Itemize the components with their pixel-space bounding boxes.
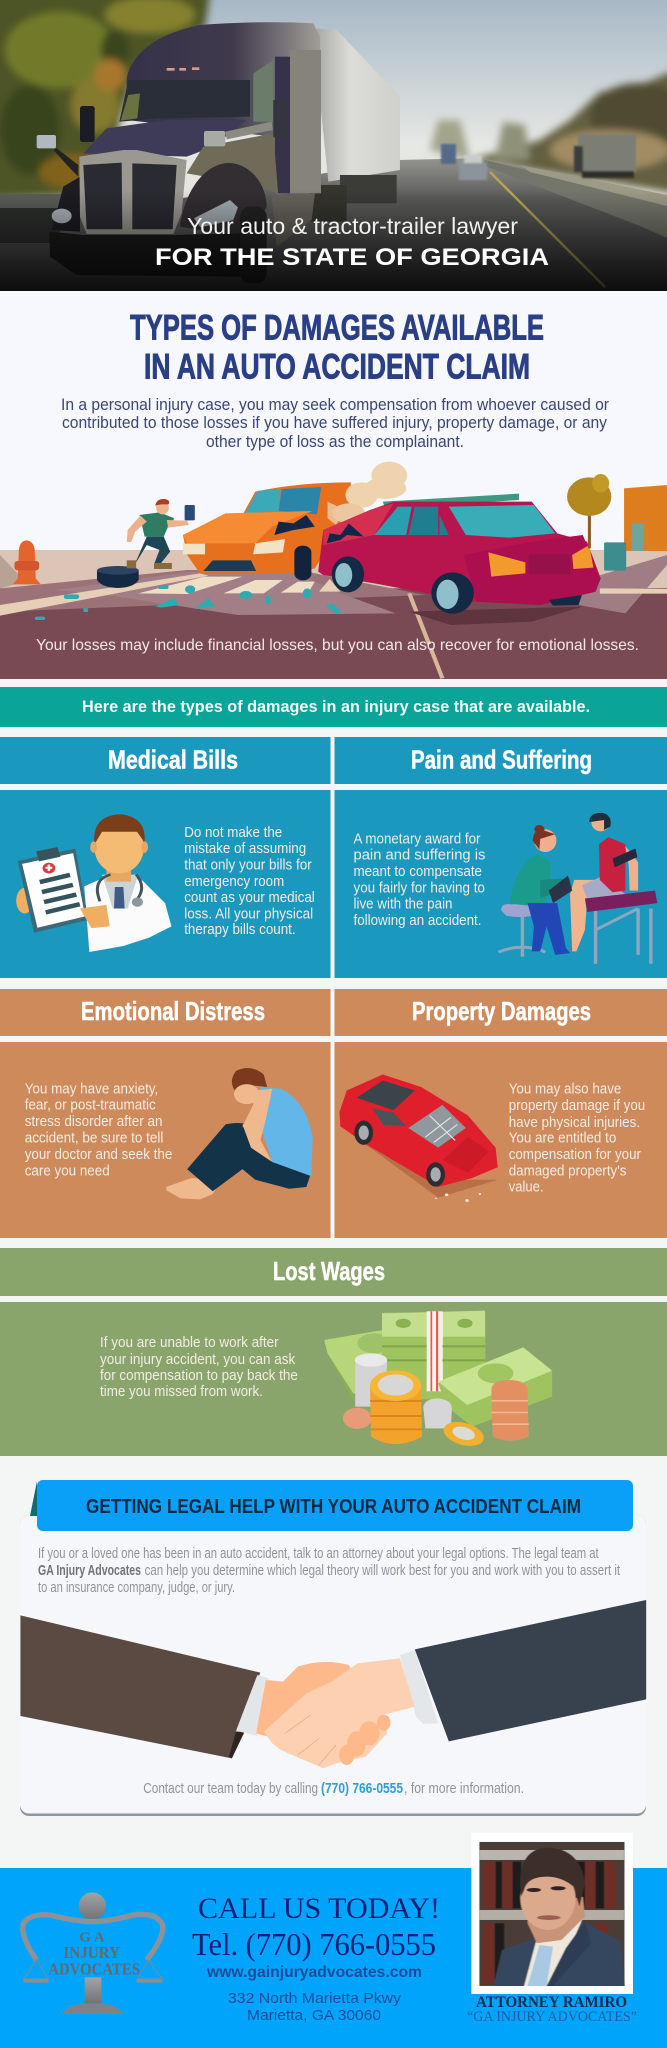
illustration: autumn tree [567, 474, 611, 548]
illustration: broken glass shards [35, 585, 342, 620]
illustration: handshake [20, 1600, 646, 1768]
teal banner [0, 687, 667, 727]
contact line [143, 1780, 524, 1797]
roadside trees [0, 0, 215, 200]
lost wages text [100, 1334, 298, 1400]
heading: emotional distress: Emotional Distress [81, 996, 265, 1026]
medical bills text: emergency room [184, 873, 284, 890]
illustration: crashed red car [338, 1074, 498, 1202]
attorney portrait [471, 1833, 633, 1994]
contact line: Contact our team today by calling [143, 1780, 318, 1797]
call us today heading: CALL US TODAY! [198, 1892, 440, 1925]
medical bills text: therapy bills count. [184, 921, 296, 938]
property damages text: have physical injuries. [509, 1114, 640, 1131]
emotional distress text: your doctor and seek the [25, 1146, 172, 1163]
intro paragraph: other type of loss as the complainant. [206, 433, 464, 451]
heading: lost wages [0, 1248, 667, 1296]
intro paragraph [61, 396, 610, 451]
emotional distress text: care you need [25, 1162, 110, 1179]
contact line: (770) 766-0555 [321, 1780, 403, 1797]
illustration: car accident scene [0, 462, 667, 679]
illustration: doctor with clipboard [16, 814, 171, 952]
heading: property damages: Property Damages [412, 996, 591, 1026]
pain and suffering text: you fairly for having to [354, 880, 485, 896]
attorney name caption: ATTORNEY RAMIRO [476, 1994, 627, 2011]
figure: man photographing the crash [127, 499, 195, 569]
illustration: red car [318, 502, 601, 614]
body paragraph: GA Injury Advocates [38, 1562, 141, 1579]
distant vehicles [441, 134, 636, 180]
property damages text: You are entitled to [509, 1130, 616, 1146]
pain and suffering text: live with the pain [354, 896, 452, 912]
property damages text: compensation for your [509, 1146, 641, 1163]
attorney name caption: “GA INJURY ADVOCATES” [467, 2009, 637, 2025]
logo: GA Injury Advocates scales [23, 1892, 163, 2014]
hero text line 1: Your auto & tractor-trailer lawyer [187, 213, 518, 239]
address: 332 North Marietta Pkwy [228, 1990, 402, 2007]
address: Marietta, GA 30060 [247, 2007, 381, 2024]
website: www.gainjuryadvocates.com [206, 1964, 422, 1981]
panel: property damages [334, 989, 667, 1238]
illustration: physical therapy [499, 813, 657, 964]
hero text line 2: FOR THE STATE OF GEORGIA [155, 244, 549, 271]
panel: lost wages [0, 1248, 667, 1456]
hero photo: truck on highway [0, 0, 667, 291]
pain and suffering text: meant to compensate [354, 863, 482, 880]
panel: pain and suffering [334, 737, 667, 978]
heading: medical bills: Medical Bills [108, 745, 238, 775]
property damages text: value. [509, 1178, 544, 1195]
title: IN AN AUTO ACCIDENT CLAIM [144, 348, 530, 386]
logo: GA Injury Advocates scales: G A [79, 1930, 105, 1945]
illustration: money and coins [324, 1311, 552, 1451]
pain and suffering text: pain and suffering is [354, 847, 485, 864]
attorney name caption [467, 1994, 637, 2025]
intro paragraph: contributed to those losses if you have suffered injury, property damage, or any [62, 414, 608, 432]
tractor-trailer truck [37, 22, 400, 283]
heading: property damages [334, 989, 667, 1036]
lost wages text: If you are unable to work after [100, 1334, 279, 1351]
body paragraph: to an insurance company, judge, or jury. [38, 1579, 235, 1596]
medical bills text: Do not make the [184, 824, 282, 841]
pain and suffering text: following an accident. [354, 912, 482, 929]
footer band [0, 1833, 667, 2048]
illustration: building [624, 485, 667, 551]
panel: emotional distress [0, 989, 330, 1238]
icon: fire hydrant [13, 540, 41, 584]
medical bills text [184, 824, 315, 938]
lost wages text: for compensation to pay back the [100, 1367, 298, 1384]
icon: loose tire [97, 566, 139, 588]
address [228, 1990, 402, 2024]
heading bar [37, 1480, 633, 1531]
medical bills text: loss. All your physical [184, 906, 313, 922]
emotional distress text: accident, be sure to tell [25, 1130, 163, 1146]
property damages text: damaged property's [509, 1162, 626, 1179]
heading: emotional distress [0, 989, 330, 1036]
emotional distress text: You may have anxiety, [25, 1080, 158, 1098]
emotional distress text: fear, or post-traumatic [25, 1097, 156, 1114]
illustration: orange car [183, 482, 351, 580]
medical bills text: count as your medical [184, 889, 315, 906]
intro paragraph: In a personal injury case, you may seek compensation from whoever caused or [61, 396, 610, 414]
property damages text: You may also have [509, 1080, 621, 1098]
lost wages text: your injury accident, you can ask [100, 1351, 296, 1368]
pain and suffering text: A monetary award for [354, 830, 480, 848]
telephone number: Tel. (770) 766-0555 [192, 1926, 436, 1962]
caption over road: Your losses may include financial losses, but you can also recover for emotional losses. [36, 637, 639, 654]
heading: lost wages: Lost Wages [273, 1256, 385, 1286]
heading: medical bills [0, 737, 330, 784]
body paragraph [38, 1545, 621, 1596]
pain and suffering text [354, 830, 485, 929]
heading bar: GETTING LEGAL HELP WITH YOUR AUTO ACCIDENT CLAIM [86, 1496, 581, 1518]
lost wages text: time you missed from work. [100, 1383, 263, 1400]
property damages text [509, 1080, 645, 1195]
teal banner: Here are the types of damages in an injury case that are available. [82, 698, 590, 716]
logo: GA Injury Advocates scales: INJURY [63, 1943, 120, 1962]
emotional distress text [25, 1080, 172, 1179]
panel: getting legal help card [20, 1480, 646, 1816]
heading: pain and suffering: Pain and Suffering [411, 745, 592, 775]
medical bills text: that only your bills for [184, 856, 312, 874]
panel: medical bills [0, 737, 330, 978]
illustration: distressed man [166, 1068, 313, 1199]
emotional distress text: stress disorder after an [25, 1113, 163, 1130]
contact line: , for more information. [404, 1780, 524, 1797]
heading: pain and suffering [334, 737, 667, 784]
icon: mailbox [604, 542, 626, 571]
property damages text: property damage if you [509, 1097, 645, 1114]
title [130, 308, 544, 386]
medical bills text: mistake of assuming [184, 840, 306, 857]
panel: types of damages intro [0, 291, 667, 679]
illustration: dust cloud [333, 462, 407, 523]
logo: GA Injury Advocates scales: ADVOCATES [48, 1960, 140, 1979]
